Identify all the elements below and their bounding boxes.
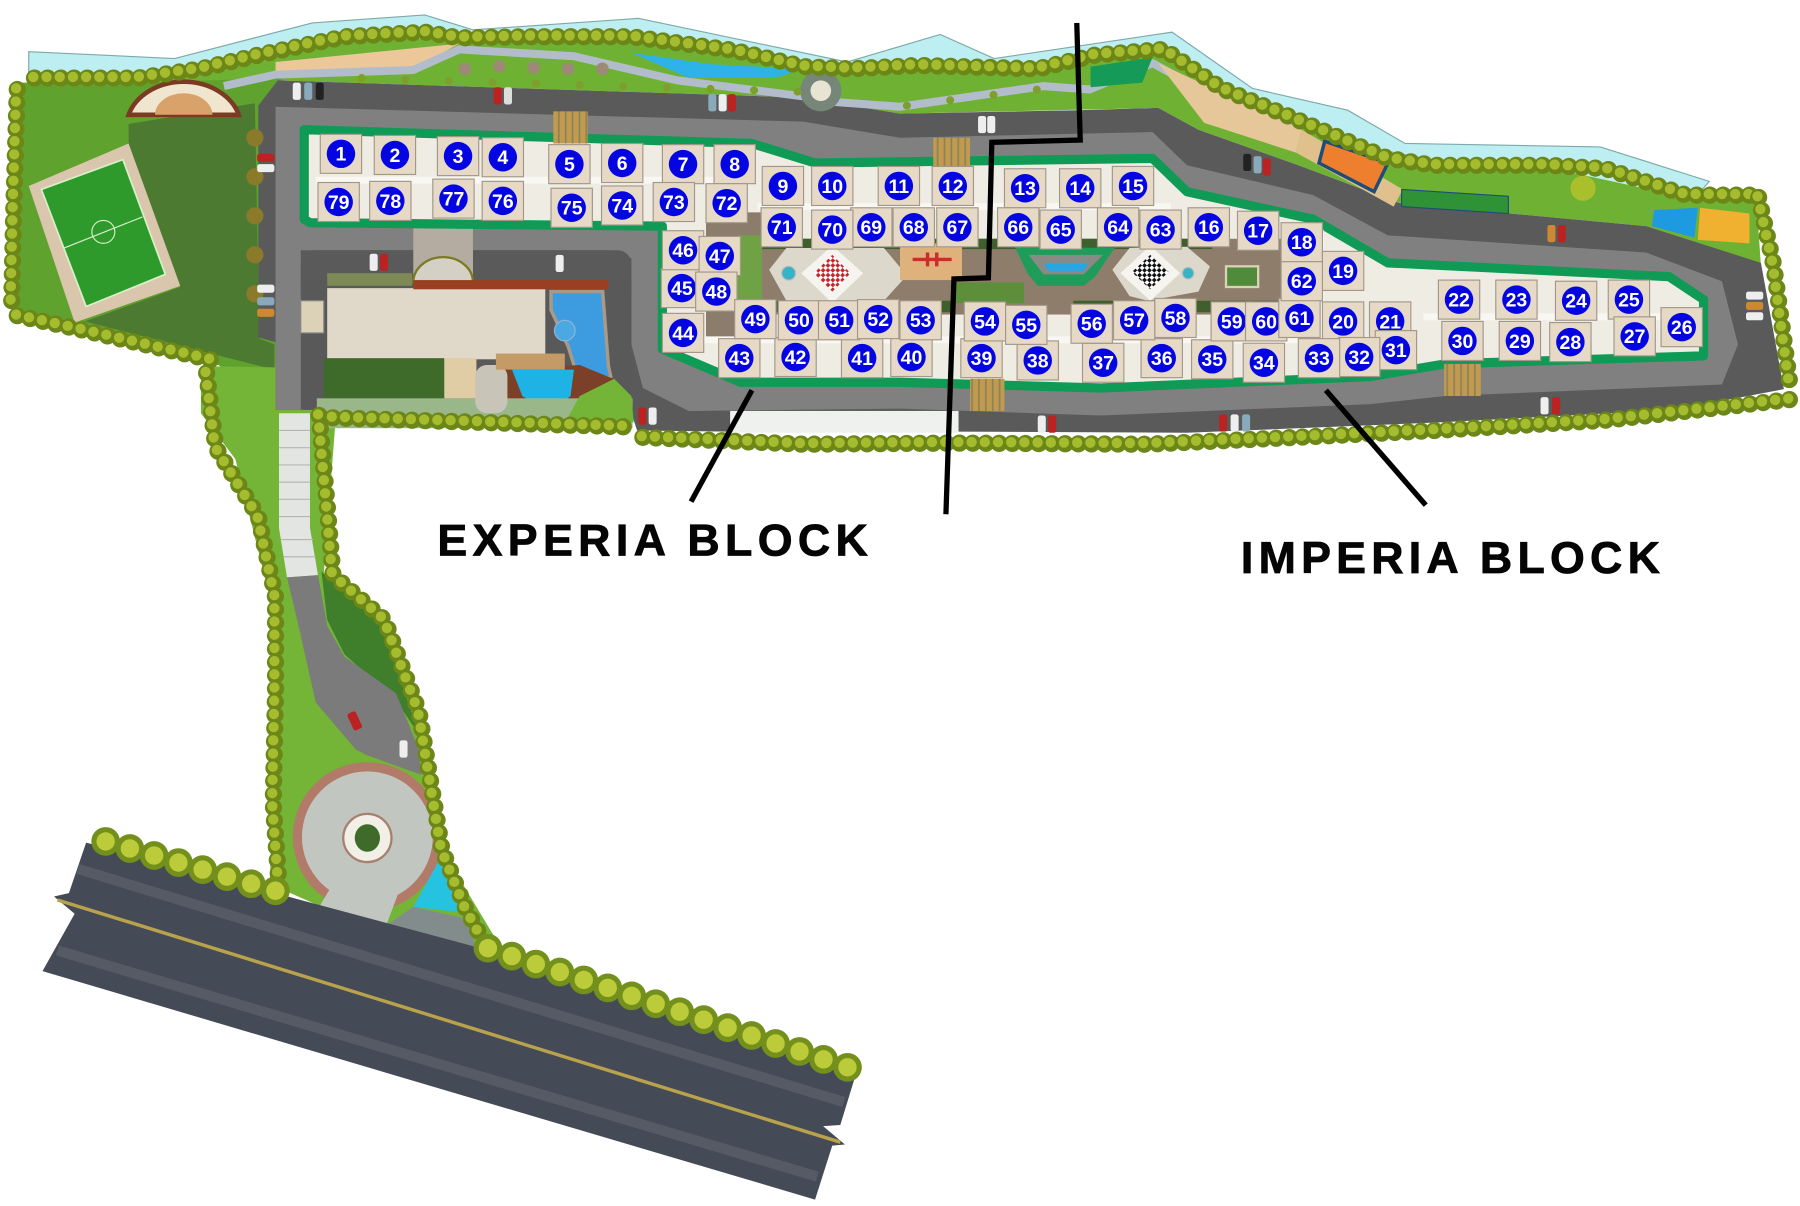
zebra crossing 3 (970, 379, 1004, 411)
units 32 to 43, south row: 39 (971, 348, 992, 370)
black chess board (1132, 255, 1169, 289)
units 1 to 8, north row: 8 (729, 154, 740, 176)
dark green corner (1288, 266, 1320, 305)
units 22 to 31, east end: 30 (1452, 331, 1473, 353)
driveway stairs (279, 413, 318, 577)
units 16 to 21, east bend: 21 (1379, 311, 1401, 333)
units 32 to 43, south row: 36 (1151, 348, 1173, 370)
white access strip (730, 411, 959, 433)
units 16 to 21, east bend: 16 (1198, 217, 1220, 239)
roadside trees by highway (106, 841, 855, 1070)
units 32 to 43, south row: 38 (1027, 350, 1049, 372)
units 49 to 62, court south side: 54 (974, 311, 996, 333)
units 9 to 15, north row (762, 166, 1154, 208)
units 44 to 48, west column: 44 (672, 323, 694, 345)
units 16 to 21, east bend: 17 (1247, 221, 1269, 243)
upper hedge (762, 239, 1212, 249)
garden shrubs (465, 65, 608, 69)
terrace (496, 354, 565, 370)
units 9 to 15, north row: 11 (889, 176, 909, 198)
tree cluster (1570, 176, 1596, 201)
units 49 to 62, court south side: 53 (910, 310, 932, 332)
pool deck circle (554, 320, 575, 341)
units 32 to 43, south row: 33 (1308, 348, 1330, 370)
right hexagon plaza (1112, 247, 1210, 301)
water feature at entry (413, 855, 465, 913)
left hexagon plaza (769, 248, 907, 301)
units 49 to 62, court south side: 49 (745, 309, 766, 331)
units 9 to 15, north row: 13 (1014, 178, 1036, 200)
units 32 to 43, south row: 37 (1092, 353, 1114, 375)
units 1 to 8, north row: 1 (336, 144, 347, 166)
block divider line (946, 23, 1080, 514)
lawn below play (955, 282, 1024, 303)
lower entry garden and driveway lawn (201, 366, 494, 947)
tree rows (10, 31, 1791, 939)
zebra crossing 4 (1444, 364, 1481, 396)
units 22 to 31, east end: 26 (1671, 317, 1693, 339)
tennis court (1319, 141, 1388, 192)
corridors (316, 180, 1670, 344)
units 32 to 43, south row: 40 (901, 347, 922, 369)
units 9 to 15, north row: 12 (942, 176, 964, 198)
units 32 to 43, south row: 35 (1201, 349, 1223, 371)
units 49 to 62, court south side: 58 (1165, 308, 1186, 330)
units 49 to 62, court south side: 59 (1221, 311, 1243, 333)
play area (900, 243, 962, 280)
units 44 to 48, west column: 45 (671, 278, 693, 300)
units 63 to 71, court north side: 71 (771, 217, 793, 239)
blue court (1652, 208, 1698, 238)
dome entry (413, 257, 473, 282)
palm row beside road (362, 78, 1056, 106)
units 72 to 79, west wing south row: 78 (379, 191, 401, 213)
units 32 to 43, south row: 41 (851, 348, 873, 370)
lower hedge (735, 301, 953, 312)
units 63 to 71, court north side: 66 (1007, 217, 1029, 239)
units 72 to 79, west wing south row: 77 (443, 188, 464, 210)
units 32 to 43, south row: 42 (785, 347, 807, 369)
units 32 to 43, south row: 34 (1253, 353, 1275, 375)
units 72 to 79, west wing south row (318, 179, 747, 227)
units 16 to 21, east bend: 20 (1332, 311, 1354, 333)
units 22 to 31, east end: 27 (1624, 326, 1646, 348)
clubhouse forecourt (413, 226, 473, 281)
parked cars (257, 83, 1763, 758)
units 1 to 8, north row: 3 (453, 146, 464, 168)
units 9 to 15, north row: 10 (821, 176, 843, 198)
units 22 to 31, east end: 31 (1385, 340, 1407, 362)
sand court base (1296, 130, 1403, 207)
court base (762, 239, 1288, 315)
lawn (324, 358, 444, 398)
green court (1402, 189, 1508, 214)
units 63 to 71, court north side (761, 208, 1181, 249)
units 49 to 62, court south side: 52 (867, 309, 889, 331)
amphitheatre (129, 82, 239, 115)
main highway (43, 843, 858, 1200)
light driving lane (276, 107, 1738, 416)
zebra crossing 2 (933, 138, 970, 169)
pond deck (1029, 255, 1103, 274)
units 22 to 31, east end: 23 (1506, 289, 1527, 311)
units 44 to 48, west column (661, 231, 740, 352)
pond water (1043, 263, 1088, 271)
kids play sand area (276, 44, 459, 71)
garden right of pool (563, 379, 634, 427)
units 72 to 79, west wing south row: 74 (611, 195, 633, 217)
lighter asphalt band (57, 869, 844, 1177)
units 1 to 8, north row: 7 (678, 154, 688, 176)
seating circles (475, 365, 507, 413)
clubhouse loop road (301, 250, 631, 308)
circular plaza (800, 70, 841, 111)
units 22 to 31, east end: 29 (1509, 331, 1531, 353)
top garden strip (32, 37, 1761, 266)
sand strip (1158, 63, 1302, 153)
left park lawn (14, 78, 281, 396)
units 16 to 21, east bend: 19 (1332, 261, 1354, 283)
units 72 to 79, west wing south row: 75 (561, 198, 583, 220)
units 9 to 15, north row: 9 (777, 176, 788, 198)
units 72 to 79, west wing south row: 73 (663, 192, 685, 214)
dark lawn block (85, 103, 274, 370)
units 32 to 43, south row (719, 337, 1380, 382)
white diamond (801, 246, 863, 303)
units 49 to 62, court south side (735, 262, 1322, 344)
terracotta deck edge (413, 280, 608, 289)
units 1 to 8, north row (320, 134, 755, 184)
units 63 to 71, court north side: 67 (947, 217, 968, 239)
courtyard garden (737, 235, 762, 302)
brown deck (505, 365, 613, 419)
clubhouse plot (301, 257, 634, 428)
units 1 to 8, north row: 2 (389, 145, 400, 167)
internal road network (258, 80, 1784, 433)
entry plaza (293, 762, 442, 930)
red chess board (814, 255, 851, 292)
units 63 to 71, court north side: 65 (1050, 219, 1072, 241)
gate block (301, 301, 324, 333)
units 49 to 62, court south side: 55 (1015, 315, 1037, 337)
small fountain right (1182, 267, 1194, 279)
trees beside internal road (247, 138, 262, 333)
units 49 to 62, court south side: 50 (788, 310, 810, 332)
units 49 to 62, court south side: 57 (1123, 310, 1145, 332)
units 72 to 79, west wing south row: 72 (716, 193, 738, 215)
leisure pool (512, 370, 574, 413)
units 22 to 31, east end (1375, 280, 1702, 370)
units 22 to 31, east end: 24 (1565, 291, 1587, 313)
green sport court (1091, 57, 1153, 87)
units 49 to 62, court south side: 51 (828, 310, 850, 332)
units 63 to 71, court north side: 69 (860, 217, 882, 239)
leader line to Imperia (1326, 390, 1426, 505)
units 49 to 62, court south side: 62 (1291, 271, 1313, 293)
play equipment (913, 253, 952, 266)
units 63 to 71, court north side: 68 (903, 217, 925, 239)
units 49 to 62, court south side: 61 (1289, 308, 1310, 330)
stone steps at entry (388, 907, 476, 947)
top garden features (224, 44, 1749, 243)
units 44 to 48, west column: 47 (709, 246, 731, 268)
units 44 to 48, west column: 46 (672, 240, 694, 262)
units 1 to 8, north row: 6 (617, 153, 628, 175)
central courtyard (706, 212, 1320, 339)
units 16 to 21, east bend (1188, 208, 1411, 341)
brown paved court (706, 212, 769, 339)
numbered housing units (318, 134, 1702, 382)
units 22 to 31, east end: 22 (1448, 289, 1470, 311)
units 22 to 31, east end: 25 (1618, 289, 1640, 311)
units 1 to 8, north row: 4 (497, 147, 508, 169)
units 72 to 79, west wing south row: 76 (492, 191, 514, 213)
label: Experia block: EXPERIA BLOCK (437, 516, 868, 566)
label: Imperia block: IMPERIA BLOCK (1241, 533, 1660, 583)
units 16 to 21, east bend: 18 (1291, 232, 1313, 254)
gravel walkway (224, 49, 1302, 129)
residential block with green edge (304, 130, 1704, 388)
units 32 to 43, south row: 43 (728, 348, 750, 370)
feature garden (1226, 266, 1258, 287)
hedge pattern (327, 273, 412, 286)
units 1 to 8, north row: 5 (564, 154, 575, 176)
units 63 to 71, court north side: 70 (821, 219, 843, 241)
units 49 to 62, court south side: 60 (1255, 311, 1277, 333)
water channel along the top boundary (29, 15, 1709, 207)
plaza deck (327, 288, 545, 359)
units 72 to 79, west wing south row: 79 (328, 192, 350, 214)
entry driveway (287, 575, 421, 775)
units 32 to 43, south row: 32 (1348, 347, 1370, 369)
units 9 to 15, north row: 15 (1122, 176, 1144, 198)
lower hedge right (1073, 301, 1291, 312)
units 9 to 15, north row: 14 (1069, 178, 1091, 200)
dark lawn by driveway (321, 572, 419, 735)
units 63 to 71, court north side: 63 (1150, 219, 1172, 241)
yellow centre line (57, 900, 840, 1142)
yellow court (1698, 208, 1749, 243)
units 49 to 62, court south side: 56 (1081, 314, 1103, 336)
units 44 to 48, west column: 48 (705, 281, 727, 303)
small fountain left (782, 266, 796, 280)
white diamond right (1120, 246, 1180, 301)
lap pool (551, 292, 611, 391)
leader line to Experia (691, 390, 752, 502)
football field (29, 143, 180, 323)
pond surround (1015, 247, 1115, 286)
garden below lawn (317, 398, 633, 428)
units 22 to 31, east end: 28 (1560, 332, 1581, 354)
units 63 to 71, court north side: 64 (1107, 217, 1129, 239)
plaza centre (810, 80, 831, 101)
zebra crossing 1 (553, 111, 588, 143)
pavilions (444, 358, 476, 398)
water feature pool (631, 53, 804, 78)
